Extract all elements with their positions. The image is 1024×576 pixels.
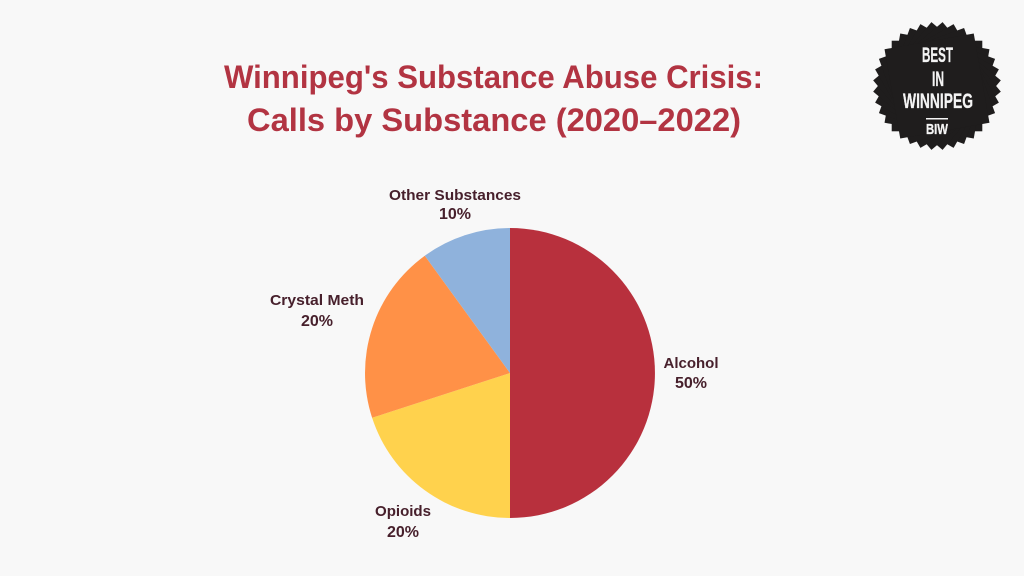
slice: Other Substances 10% xyxy=(425,228,510,373)
slice: Opioids 20% xyxy=(372,373,510,518)
label: Other Substances xyxy=(389,187,521,223)
label: Opioids: 20% xyxy=(387,524,419,541)
label: Crystal Meth: Crystal Meth xyxy=(270,292,364,309)
title xyxy=(224,59,763,138)
slice: Crystal Meth 20% xyxy=(365,256,510,418)
badge: Best in Winnipeg: BIW xyxy=(926,121,949,138)
label: Crystal Meth xyxy=(270,292,364,330)
badge: Best in Winnipeg: WINNIPEG xyxy=(903,90,973,113)
label: Other Substances: Other Substances xyxy=(389,187,521,204)
label: Alcohol: Alcohol xyxy=(664,355,718,372)
pie chart xyxy=(365,228,655,518)
badge: Best in Winnipeg: IN xyxy=(932,68,944,91)
slice: Alcohol 50% xyxy=(510,228,655,518)
label: Alcohol xyxy=(664,355,718,392)
title: Winnipeg's Substance Abuse Crisis: xyxy=(224,59,763,95)
label: Alcohol: 50% xyxy=(675,375,707,392)
label: Opioids: Opioids xyxy=(375,503,431,520)
badge: Best in Winnipeg xyxy=(873,22,1001,150)
title: Calls by Substance (2020–2022) xyxy=(247,102,741,138)
label: Opioids xyxy=(375,503,431,541)
label: Crystal Meth: 20% xyxy=(301,313,333,330)
label: Other Substances: 10% xyxy=(439,206,471,223)
badge: Best in Winnipeg: BEST xyxy=(922,44,953,67)
